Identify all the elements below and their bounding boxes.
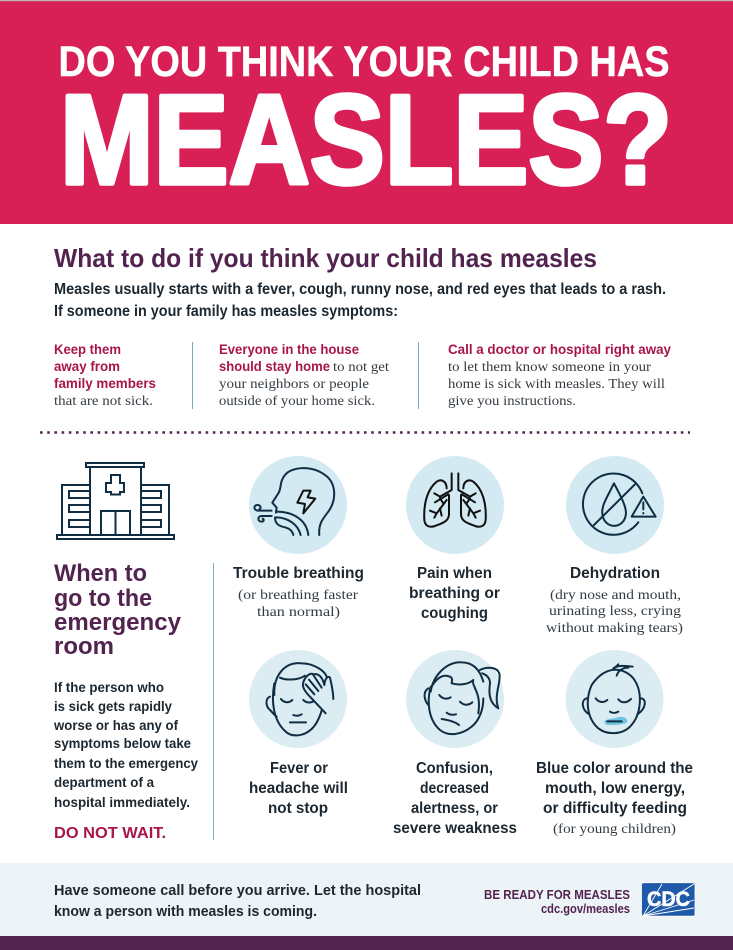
advice column 3: to let them know someone in your xyxy=(448,360,651,375)
caption: decreased xyxy=(420,780,489,797)
caption: not stop xyxy=(268,800,328,817)
footer message: Have someone call before you arrive. Let the hospital xyxy=(54,882,421,899)
symptom: pain when breathing xyxy=(406,456,504,622)
advice column 3: Call a doctor or hospital right away xyxy=(448,341,671,357)
advice column 1 xyxy=(54,341,156,409)
intro text: If someone in your family has measles symptoms: xyxy=(54,303,398,320)
caption: than normal) xyxy=(257,605,340,620)
caption: urinating less, crying xyxy=(549,604,681,619)
caption: (or breathing faster xyxy=(238,588,358,603)
advice column 2 xyxy=(219,341,389,409)
icon: baby with blue lips xyxy=(566,650,664,748)
intro text: Measles usually starts with a fever, cough, runny nose, and red eyes that leads to a rash. xyxy=(54,281,666,298)
advice column 2: should stay home xyxy=(219,358,330,374)
icon: lungs xyxy=(406,456,504,554)
do not wait callout: DO NOT WAIT. xyxy=(54,825,166,842)
emergency room instructions: worse or has any of xyxy=(53,718,178,733)
caption xyxy=(249,760,348,817)
caption xyxy=(546,565,683,636)
icon: hospital xyxy=(57,463,174,539)
caption: without making tears) xyxy=(546,621,683,636)
panel: when to go to the emergency room xyxy=(53,560,198,842)
advice column 2: to not get xyxy=(333,360,389,375)
icon: face with hand on forehead xyxy=(249,650,347,748)
emergency room instructions: department of a xyxy=(54,775,154,790)
advice column 3: home is sick with measles. They will xyxy=(448,377,665,392)
icon: CDC logo xyxy=(642,883,695,916)
caption: alertness, or xyxy=(411,800,498,817)
advice column 2: your neighbors or people xyxy=(219,377,369,392)
caption: Blue color around the xyxy=(536,760,693,777)
caption: (dry nose and mouth, xyxy=(550,588,681,603)
emergency room heading: room xyxy=(54,633,114,660)
icon: CDC logo: CDC xyxy=(647,888,690,911)
footer message xyxy=(54,882,421,920)
advice column 2: Everyone in the house xyxy=(219,341,359,357)
caption xyxy=(536,760,693,837)
icon: crossed water drop with warning xyxy=(566,456,664,554)
advice column 1: family members xyxy=(54,375,156,391)
caption: headache will xyxy=(249,780,348,797)
campaign tagline: cdc.gov/measles xyxy=(541,902,630,916)
symptom: trouble breathing xyxy=(233,456,364,620)
title line 1: DO YOU THINK YOUR CHILD HAS xyxy=(58,38,670,86)
symptom: dehydration xyxy=(546,456,683,636)
caption xyxy=(393,760,517,837)
symptom: confusion xyxy=(393,650,517,837)
caption: Fever or xyxy=(270,760,328,777)
icon: confused girl with ponytail xyxy=(406,650,504,748)
advice column 1: Keep them xyxy=(54,341,121,357)
caption xyxy=(409,565,500,622)
advice column 1: that are not sick. xyxy=(54,394,153,409)
intro text xyxy=(54,281,666,320)
caption xyxy=(233,565,364,620)
emergency room instructions: is sick gets rapidly xyxy=(54,699,172,714)
emergency room heading: When to xyxy=(54,560,147,587)
footer band xyxy=(0,863,733,950)
advice column 1: away from xyxy=(54,358,120,374)
footer message: know a person with measles is coming. xyxy=(54,903,317,920)
caption: Pain when xyxy=(417,565,492,582)
caption: breathing or xyxy=(409,585,500,602)
emergency room heading xyxy=(54,560,182,660)
emergency room instructions xyxy=(53,680,198,810)
caption: mouth, low energy, xyxy=(545,780,685,797)
caption: Trouble breathing xyxy=(233,565,364,582)
title line 2: MEASLES? xyxy=(60,68,672,210)
emergency room instructions: hospital immediately. xyxy=(54,795,190,810)
advice column 2: outside of your home sick. xyxy=(219,394,375,409)
campaign tagline: BE READY FOR MEASLES xyxy=(484,888,630,902)
section heading: What to do if you think your child has measles xyxy=(54,243,597,273)
caption: Dehydration xyxy=(570,565,660,582)
caption: coughing xyxy=(421,605,488,622)
caption: or difficulty feeding xyxy=(543,800,687,817)
caption: (for young children) xyxy=(553,822,676,837)
symptom: fever or headache xyxy=(249,650,348,817)
icon: head with breath xyxy=(249,456,347,554)
header banner xyxy=(0,0,733,224)
campaign tagline xyxy=(484,888,630,916)
emergency room heading: emergency xyxy=(54,609,182,636)
emergency room instructions: If the person who xyxy=(54,680,164,695)
advice column 3 xyxy=(448,341,671,409)
emergency room instructions: symptoms below take xyxy=(54,736,191,751)
symptom: blue colour around the mouth xyxy=(536,650,693,837)
advice column 3: give you instructions. xyxy=(448,394,576,409)
caption: Confusion, xyxy=(416,760,493,777)
emergency room heading: go to the xyxy=(54,585,152,612)
emergency room instructions: them to the emergency xyxy=(54,756,198,771)
caption: severe weakness xyxy=(393,820,517,837)
